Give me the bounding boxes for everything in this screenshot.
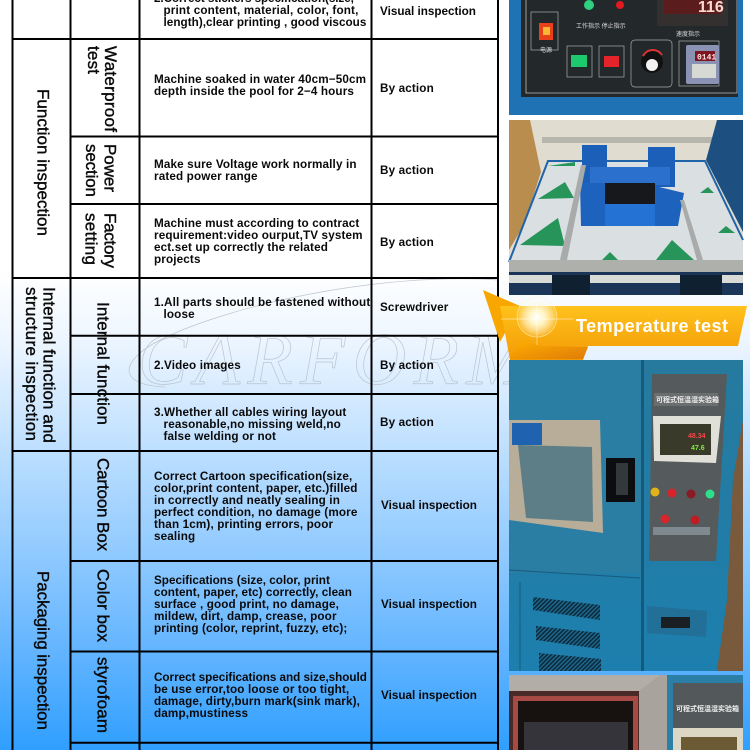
section label: Function inspection: Function inspection [34, 89, 52, 236]
power switch [531, 12, 558, 50]
row: styrofoam: styrofoam [94, 657, 112, 733]
banner title: Temperature test [576, 316, 728, 336]
blue test stand [580, 145, 684, 226]
row: stickers (partly cropped): Visual inspection [380, 5, 476, 18]
row: video images [154, 359, 434, 372]
row: Color box [94, 569, 477, 642]
chamber window [509, 420, 603, 533]
row: stickers (partly cropped): print content, material, color, font, [164, 4, 358, 17]
control panel [673, 683, 743, 750]
row: Cartoon Box [94, 458, 477, 552]
section label: Internal function and structure inspection: Internal function and [40, 287, 58, 443]
row: Cartoon Box: perfect condition, no damage (more [154, 506, 358, 519]
teal cabinet side [667, 675, 743, 750]
section label: Internal function and structure inspection: structure inspection [22, 287, 41, 441]
row: fastened parts: 1.All parts should be fastened without [154, 296, 370, 309]
touch screen [653, 416, 721, 463]
row: Cartoon Box: sealing [154, 530, 195, 543]
speed display [657, 0, 728, 26]
stop indicator [616, 1, 624, 9]
row: Power section: Power [100, 144, 120, 192]
row: Color box: Color box [94, 569, 112, 642]
row: cables wiring: reasonable,no missing weld,no [164, 418, 341, 431]
blue cabinet right [706, 120, 743, 232]
column label: Internal function: Internal function [94, 302, 112, 425]
wall rail [542, 137, 712, 143]
photo: temperature chamber [509, 360, 743, 671]
metal door frame [639, 675, 667, 750]
row: Factory setting: requirement:video ourput,TV system [154, 229, 363, 242]
door handle [606, 458, 635, 502]
row: styrofoam: damp,mustiness [154, 707, 249, 720]
row: Factory setting: By action [380, 236, 434, 249]
sun flare [501, 296, 573, 345]
ventilation slots [533, 597, 601, 671]
row: Power section: rated power range [154, 170, 258, 183]
row: Color box: printing (color, reprint, fuzzy, etc); [154, 622, 347, 635]
row: video images: By action [380, 359, 434, 372]
row: Factory setting: Factory [100, 213, 120, 268]
speed knob [631, 40, 672, 87]
row: Color box: content, paper, etc) correctly, clean [154, 586, 352, 599]
row: Waterproof test [84, 46, 434, 132]
row: Waterproof test: Machine soaked in water 40cm−50cm [154, 73, 366, 86]
row: Cartoon Box: in correctly and neatly sealing in [154, 494, 340, 507]
row: Cartoon Box: than 1cm), printing errors, poor [154, 518, 333, 531]
start button [567, 46, 592, 77]
row: Cartoon Box: Correct Cartoon specification(size, [154, 470, 352, 483]
watermark: CARFORM logo: CARFORM [138, 319, 532, 401]
photo: open chamber [509, 675, 743, 750]
section label: Packaging inspection: Packaging inspection [34, 571, 52, 730]
touch screen: 47.6 [691, 445, 705, 452]
row: styrofoam: be use error,too loose or too tight, [154, 683, 349, 696]
photo: control panel [509, 0, 743, 115]
row: fastened parts: loose [164, 308, 195, 321]
row: Factory setting: Machine must according to contract [154, 217, 359, 230]
row: Waterproof test: By action [380, 82, 434, 95]
row: fastened parts [154, 296, 449, 321]
table grid lines [12, 0, 499, 750]
side rails [560, 165, 703, 260]
inspection table [12, 0, 499, 750]
row: stickers (partly cropped) [154, 0, 476, 29]
row: Factory setting: ect.set up correctly the related [154, 241, 328, 254]
panel heading: 可程式恒温湿实验箱 [676, 704, 739, 713]
row: Factory setting: projects [154, 253, 201, 266]
row: Waterproof test: test [84, 46, 103, 74]
row: Factory setting: setting [82, 213, 100, 265]
timer: 0141 [697, 54, 716, 62]
front rail and base [509, 260, 743, 272]
green logos [520, 162, 735, 260]
panel labels: 速度指示 [676, 30, 700, 38]
company nameplate [653, 527, 710, 535]
row: Power section [82, 144, 434, 197]
control column: 可程式恒温湿实验箱 [656, 395, 719, 404]
panel labels: 电源 [540, 46, 552, 54]
row: Factory setting [82, 213, 434, 268]
row: cables wiring: false welding or not [164, 430, 276, 443]
row: styrofoam: Visual inspection [381, 689, 477, 702]
row: styrofoam: Correct specifications and size,should [154, 671, 367, 684]
panel labels [540, 22, 700, 54]
stop button [599, 46, 624, 77]
row: fastened parts: Screwdriver [380, 301, 449, 314]
panel labels: 工作指示 停止指示 [576, 22, 626, 30]
row: styrofoam: damage, dirty,burn mark(sink mark), [154, 695, 360, 708]
timer [679, 41, 719, 86]
touch screen: 48.34 [688, 433, 706, 440]
table surface [509, 161, 743, 266]
row: cables wiring: 3.Whether all cables wiring layout [154, 406, 346, 419]
row: stickers (partly cropped): length),clear printing , good viscous [164, 16, 367, 29]
row: cables wiring [154, 406, 434, 443]
row: Power section: By action [380, 164, 434, 177]
cardboard boxes [509, 120, 541, 250]
row: Cartoon Box: color,print content, paper, etc.)filled [154, 482, 358, 495]
row: Color box: surface , good print, no damage, [154, 598, 339, 611]
section label: Internal function and structure inspection [22, 287, 58, 443]
lower drawer [647, 606, 707, 637]
row: Waterproof test: depth inside the pool for 2−4 hours [154, 85, 354, 98]
row: Power section: section [82, 144, 101, 197]
row: Color box: mildew, dirt, damp, crease, poor [154, 610, 337, 623]
right edge background [717, 420, 743, 671]
photo: drop test machine [509, 120, 743, 295]
row: Color box: Specifications (size, color, print [154, 574, 330, 587]
indicator lamps [650, 488, 714, 524]
row: Waterproof test: Waterproof [101, 46, 120, 132]
row: Cartoon Box: Cartoon Box [94, 458, 112, 552]
indicator lights [584, 0, 594, 10]
watermark: CARFORM logo [129, 279, 532, 401]
row: cables wiring: By action [380, 416, 434, 429]
touch screen [673, 728, 743, 750]
lower panel seam [509, 570, 640, 671]
row: Cartoon Box: Visual inspection [381, 499, 477, 512]
row: Power section: Make sure Voltage work normally in [154, 158, 357, 171]
row: video images: 2.Video images [154, 359, 241, 372]
control column [649, 374, 727, 561]
banner: Temperature test [483, 290, 747, 360]
row: styrofoam [94, 657, 477, 733]
row: Color box: Visual inspection [381, 598, 477, 611]
